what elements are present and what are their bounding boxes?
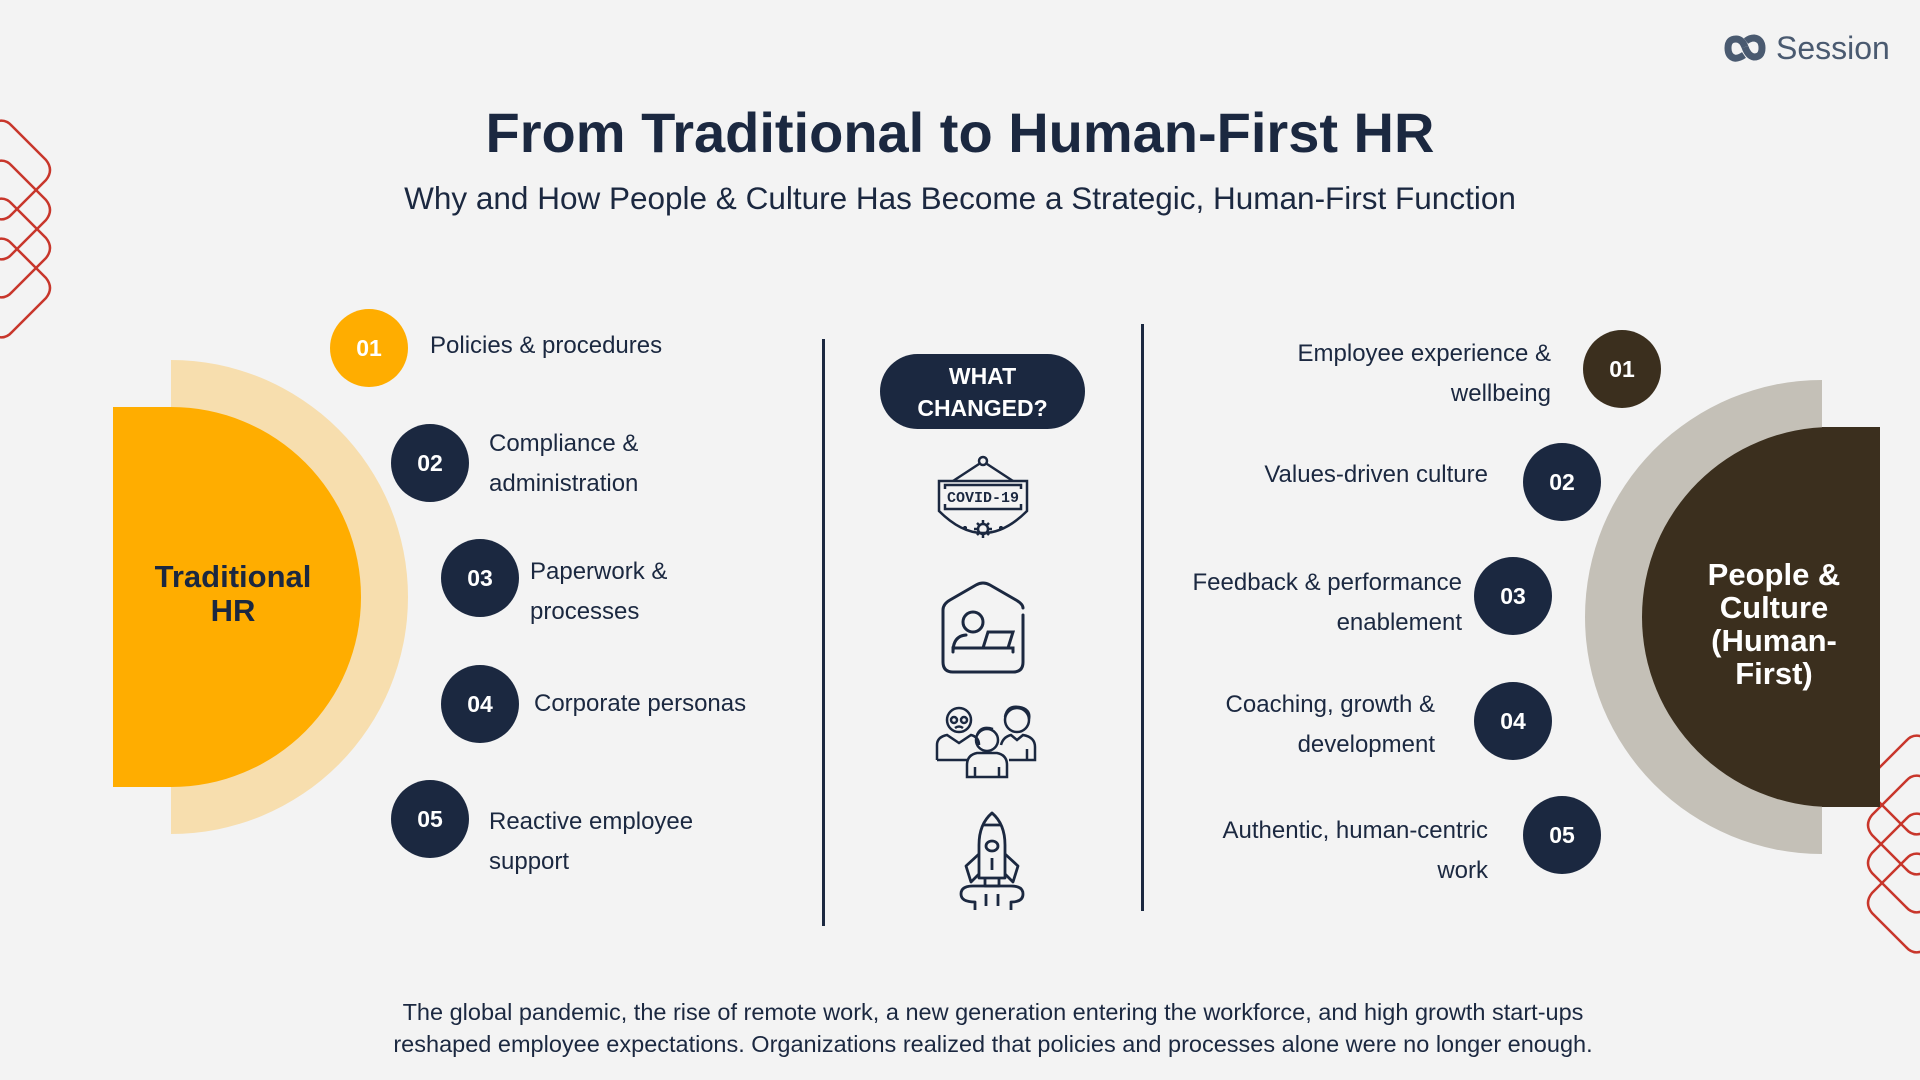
right list item 02: [1264, 443, 1601, 521]
icon: remote work home: [942, 582, 1024, 674]
right list item 03: 03: [1500, 582, 1526, 608]
right list item 03: Feedback & performance: [1193, 569, 1462, 596]
left list item 02: Compliance &: [489, 430, 638, 457]
left list item 04: Corporate personas: [534, 690, 746, 717]
what changed pill: CHANGED?: [917, 395, 1048, 421]
decoration: right chevrons: [1866, 734, 1920, 954]
label: Traditional HR: Traditional: [155, 559, 311, 594]
left list item 03: [441, 539, 667, 625]
right list item 01: 01: [1609, 356, 1635, 382]
label: People & Culture: Culture: [1720, 590, 1828, 625]
right list item 02: 02: [1549, 468, 1575, 494]
what changed pill: [880, 354, 1085, 429]
right list item 05: 05: [1549, 822, 1575, 848]
label: People & Culture: (Human-: [1711, 623, 1837, 658]
left list item 04: 04: [467, 690, 493, 716]
right list item 05: Authentic, human-centric: [1223, 817, 1488, 844]
right list item 04: development: [1298, 731, 1435, 758]
icon: covid sign: COVID-19: [947, 490, 1019, 507]
icon: rocket: [960, 812, 1024, 910]
left list item 05: [391, 780, 693, 875]
what changed pill: WHAT: [949, 363, 1016, 389]
right list item 01: Employee experience &: [1298, 340, 1551, 367]
left list item 05: support: [489, 848, 569, 875]
bottom text: [393, 999, 1593, 1057]
right list item 03: [1193, 557, 1552, 636]
right list item 03: enablement: [1337, 609, 1462, 636]
left list item 03: Paperwork &: [530, 558, 667, 585]
left list item 02: [391, 424, 638, 502]
logo: [1724, 30, 1890, 66]
left list item 01: 01: [356, 334, 382, 360]
left list item 03: processes: [530, 598, 639, 625]
icon: generations of people: [936, 706, 1036, 778]
right list item 05: [1222, 796, 1601, 884]
label: Traditional HR: HR: [211, 593, 255, 628]
bottom text: The global pandemic, the rise of remote work, a new generation entering the workforce, and high growth start-ups: [403, 999, 1583, 1025]
right list item 04: Coaching, growth &: [1226, 691, 1435, 718]
panel: people & culture semicircle: [1585, 380, 1880, 854]
divider lines: [822, 339, 825, 926]
right list item 01: [1298, 330, 1661, 408]
logo: Session: [1776, 30, 1890, 66]
left list item 04: [441, 665, 746, 743]
left list item 02: 02: [417, 450, 443, 476]
left list item 05: Reactive employee: [489, 808, 693, 835]
right list item 02: Values-driven culture: [1264, 461, 1488, 488]
bottom text: reshaped employee expectations. Organizations realized that policies and processes alone were no longer enough.: [393, 1031, 1593, 1057]
subtitle: Why and How People & Culture Has Become a Strategic, Human-First Function: [404, 180, 1516, 216]
label: People & Culture: [1708, 557, 1840, 691]
label: Traditional HR: [154, 559, 311, 628]
left list item 01: [330, 309, 662, 387]
left list item 03: 03: [467, 564, 493, 590]
label: People & Culture: People &: [1708, 557, 1840, 592]
right list item 04: [1226, 682, 1552, 760]
label: People & Culture: First): [1735, 656, 1813, 691]
right list item 04: 04: [1500, 708, 1526, 734]
icon: covid sign: [938, 456, 1028, 538]
decoration: left chevrons: [0, 119, 52, 339]
left list item 01: Policies & procedures: [430, 332, 662, 359]
right list item 05: work: [1437, 857, 1488, 884]
left list item 05: 05: [417, 806, 443, 832]
left list item 02: administration: [489, 470, 638, 497]
right list item 01: wellbeing: [1451, 380, 1551, 407]
panel: traditional HR semicircle: [113, 360, 408, 834]
title: From Traditional to Human-First HR: [486, 101, 1434, 164]
